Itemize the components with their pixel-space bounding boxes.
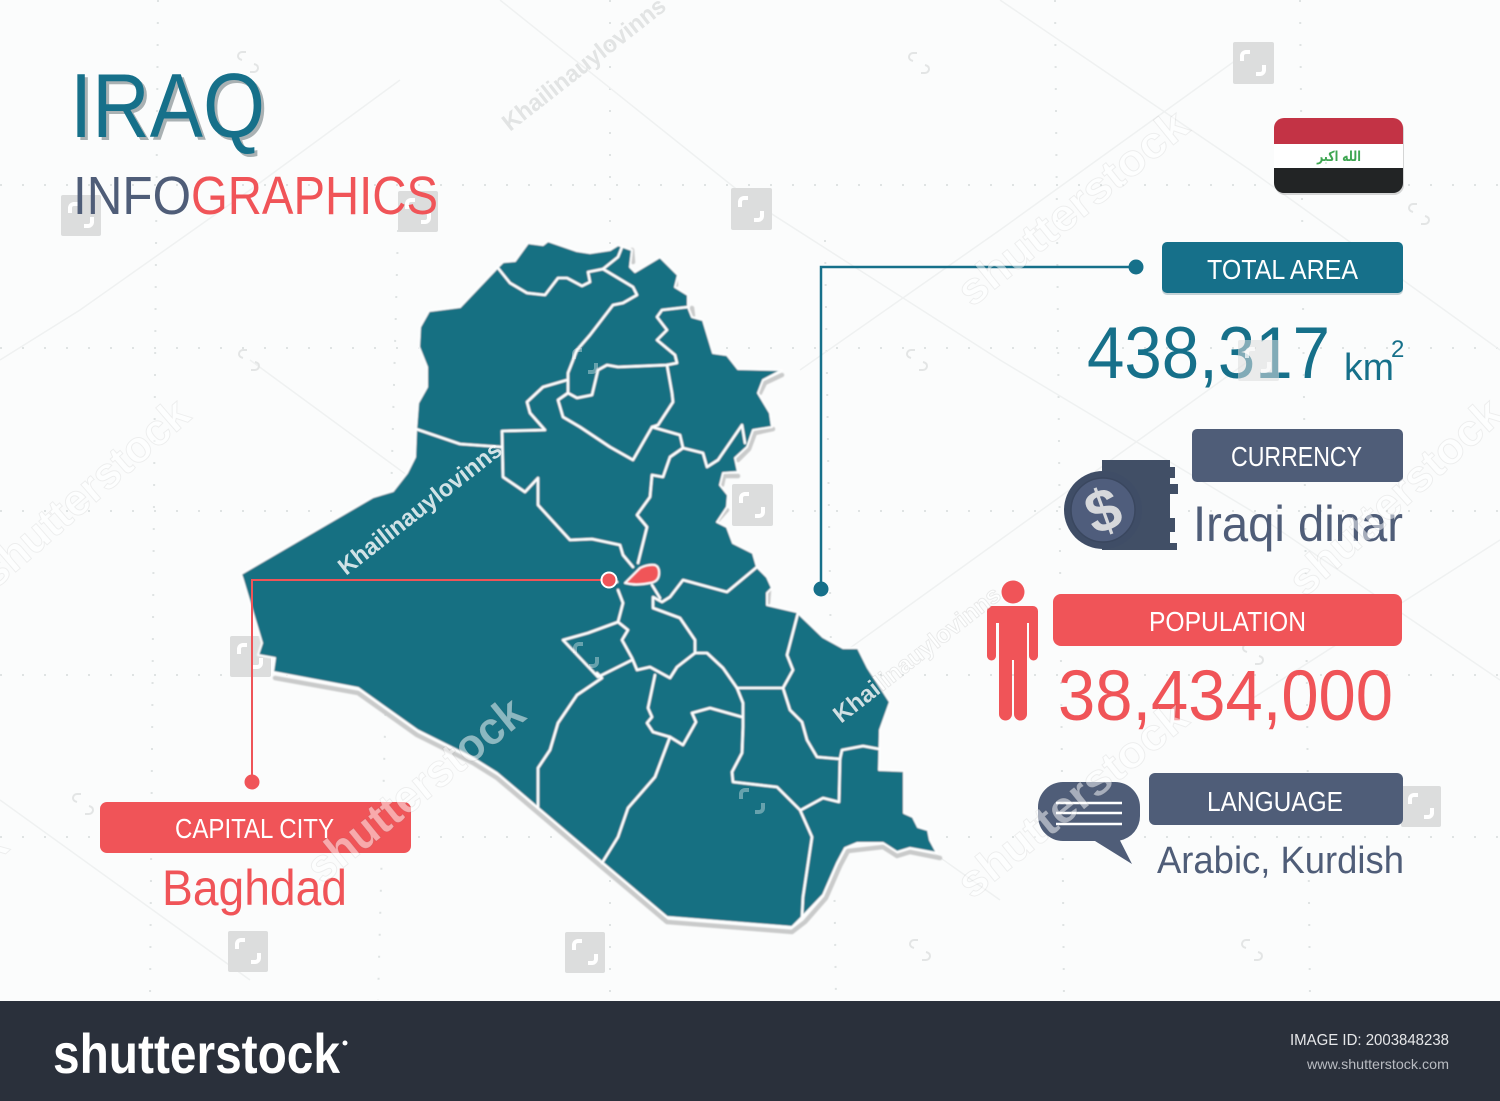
subheading: INFOGRAPHICS: GRAPHICS [191,166,438,226]
label: total area: TOTAL AREA [1207,254,1358,285]
icon: coin stack: $ [1076,473,1130,548]
title [70,56,438,226]
text: Khailinauylovinns [828,581,1006,729]
value: population: 38,434,000 [1058,657,1393,736]
connector: total area [814,260,1144,596]
label: total area [1162,242,1403,295]
label: currency [1192,429,1403,482]
icon: coin stack [1064,460,1178,550]
label: population: POPULATION [1149,606,1306,637]
label: language: LANGUAGE [1207,786,1343,817]
image id: IMAGE ID: 2003848238 [1290,1032,1449,1049]
label: population [1053,594,1402,646]
value: language: Arabic, Kurdish [1157,840,1404,882]
watermarks: shutterstock [947,692,1198,908]
value: total area: 438,317 [1087,313,1330,394]
label: currency: CURRENCY [1231,441,1362,472]
footer bar [0,1001,1500,1101]
watermarks: shutterstock [296,685,535,893]
heading: IRAQ: IRAQ [70,56,265,157]
text: Khailinauylovinns [333,436,507,581]
highlighted region: Baghdad [625,565,659,584]
icon: speech bubble [1038,782,1140,864]
connector: capital city [244,572,616,790]
icon: Iraq flag [1274,118,1404,195]
value: capital city: Baghdad [162,860,347,916]
value: total area: 2 [1391,336,1404,363]
value: currency: Iraqi dinar [1193,496,1403,552]
icon: Iraq flag: الله اكبر [1316,149,1361,165]
subheading: INFOGRAPHICS: INFO [73,166,191,226]
value: total area: km [1344,347,1394,389]
website: www.shutterstock.com [1306,1056,1449,1072]
heading: IRAQ: IRAQ [73,59,268,160]
subheading: INFOGRAPHICS [73,166,438,226]
logo: shutterstock: shutterstock [53,1022,341,1085]
map: Iraq provinces [241,241,940,932]
label: capital city: CAPITAL CITY [175,813,334,844]
icon: person [987,580,1038,721]
label: capital city [100,802,411,853]
watermarks: shutterstock [947,100,1198,316]
label: language [1149,773,1403,825]
